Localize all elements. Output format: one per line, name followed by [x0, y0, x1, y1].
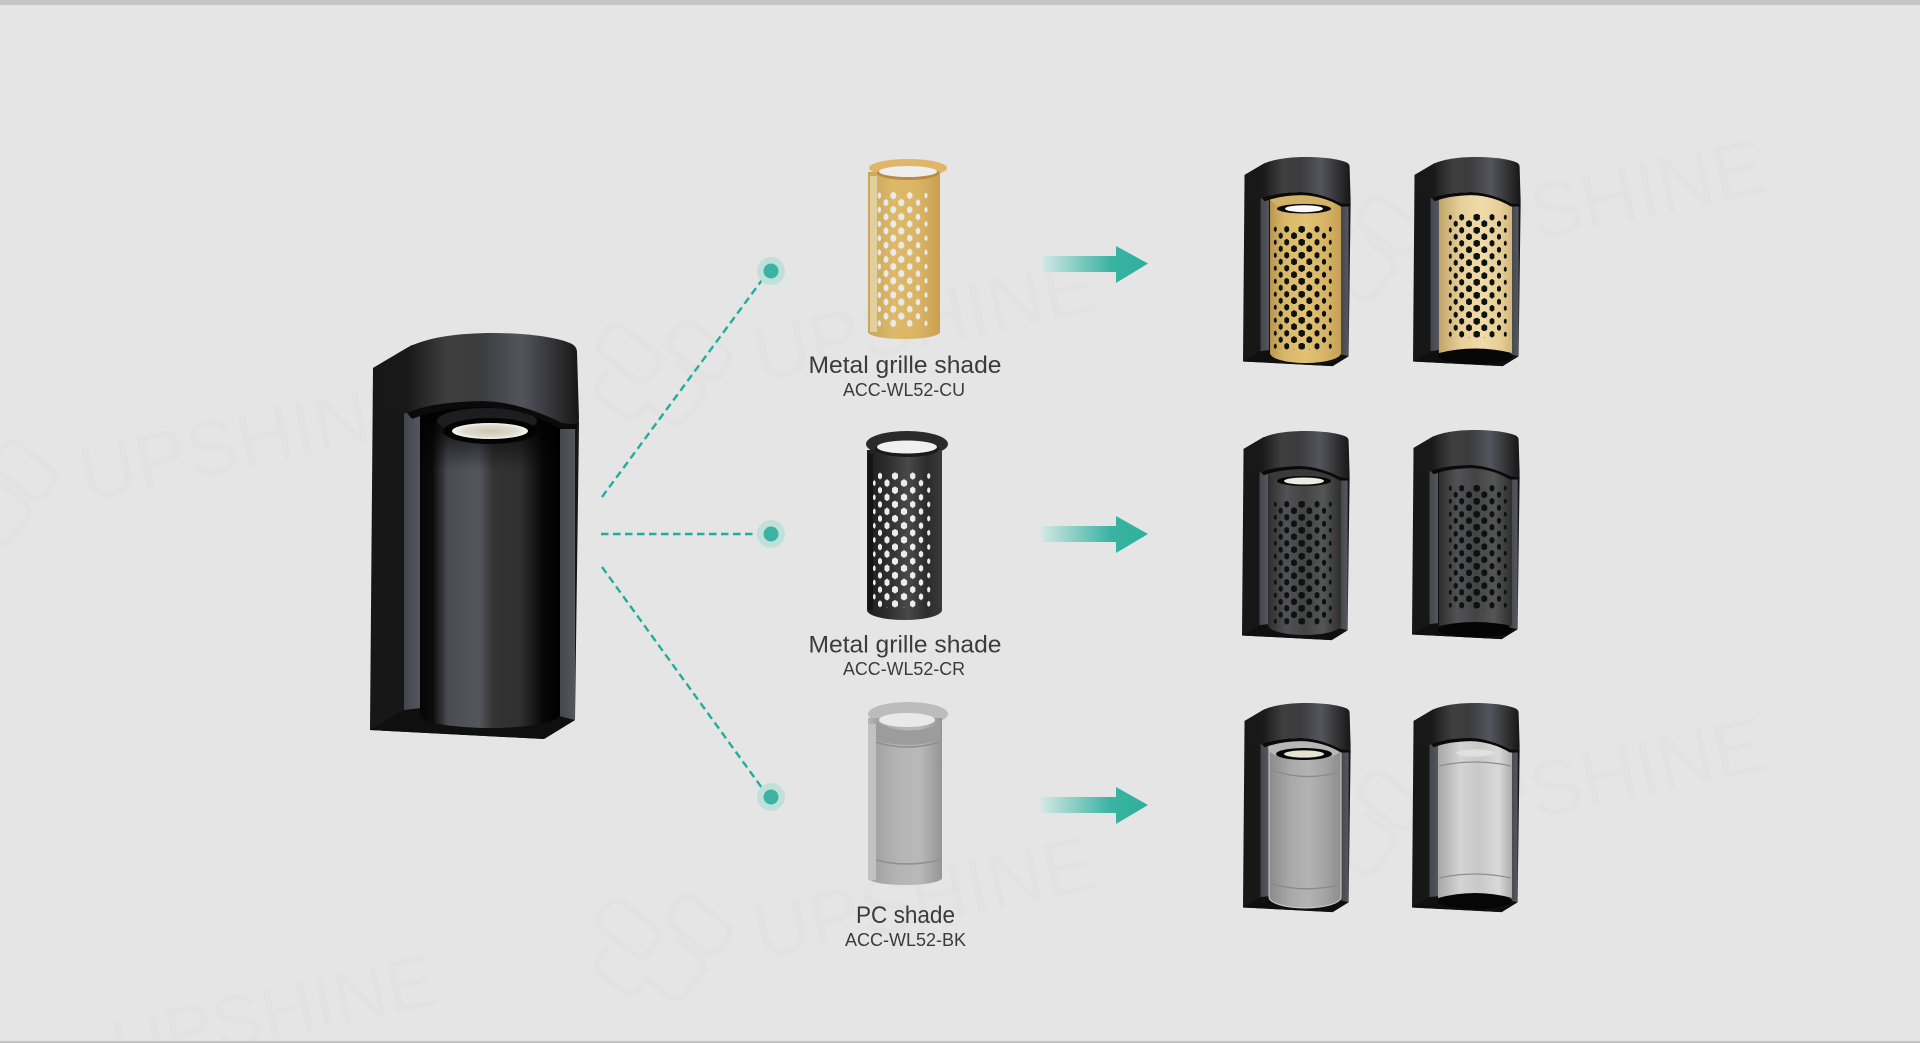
lamp: PC shade, front view with light — [1243, 703, 1351, 912]
watermark: center top: UPSHINE — [745, 240, 1103, 399]
watermark: lower right: UPSHINE — [1415, 699, 1773, 858]
shade name: Metal grille shade — [808, 352, 1002, 379]
watermark: center bottom: UPSHINE — [745, 818, 1103, 977]
lamp cylinder — [420, 410, 560, 728]
shade name: PC shade — [856, 902, 955, 929]
shade name: Metal grille shade — [808, 632, 1002, 658]
black metal grille shade — [808, 431, 1002, 679]
shade model code: ACC-WL52-CR — [843, 659, 965, 679]
dashed connector: bottom — [602, 567, 762, 788]
connectors and nodes — [601, 257, 785, 811]
node: middle — [757, 520, 785, 548]
node: bottom — [757, 783, 785, 811]
watermark logo: upper right — [1282, 193, 1424, 303]
lamp: black shade, front view with light — [1242, 431, 1350, 640]
watermark logo: left — [0, 438, 59, 548]
dashed connector: middle — [601, 533, 755, 535]
PC shade — [845, 702, 966, 950]
shade model code: ACC-WL52-BK — [845, 930, 966, 950]
arrow: row 2 — [1041, 516, 1148, 553]
watermark: top right: UPSHINE — [1415, 121, 1773, 280]
dashed connector: top — [602, 280, 762, 497]
watermark: left: UPSHINE — [71, 360, 429, 519]
lamp: PC shade, side view — [1412, 703, 1520, 912]
arrow: row 3 — [1041, 787, 1148, 824]
node: top — [757, 257, 785, 285]
main wall lamp — [370, 333, 579, 739]
shade model code: ACC-WL52-CU — [843, 380, 965, 400]
recessed light — [437, 408, 537, 444]
lamp: black shade, side view — [1412, 430, 1520, 639]
arrow: row 1 — [1042, 246, 1148, 283]
lamp: gold shade, side view — [1413, 157, 1521, 366]
watermark logo: center top — [592, 318, 734, 428]
watermark logo: center bottom — [592, 893, 734, 1003]
watermark logo: lower right — [1282, 768, 1424, 878]
lamp: gold shade, front view with light — [1243, 157, 1351, 366]
gold metal grille shade — [808, 159, 1002, 400]
